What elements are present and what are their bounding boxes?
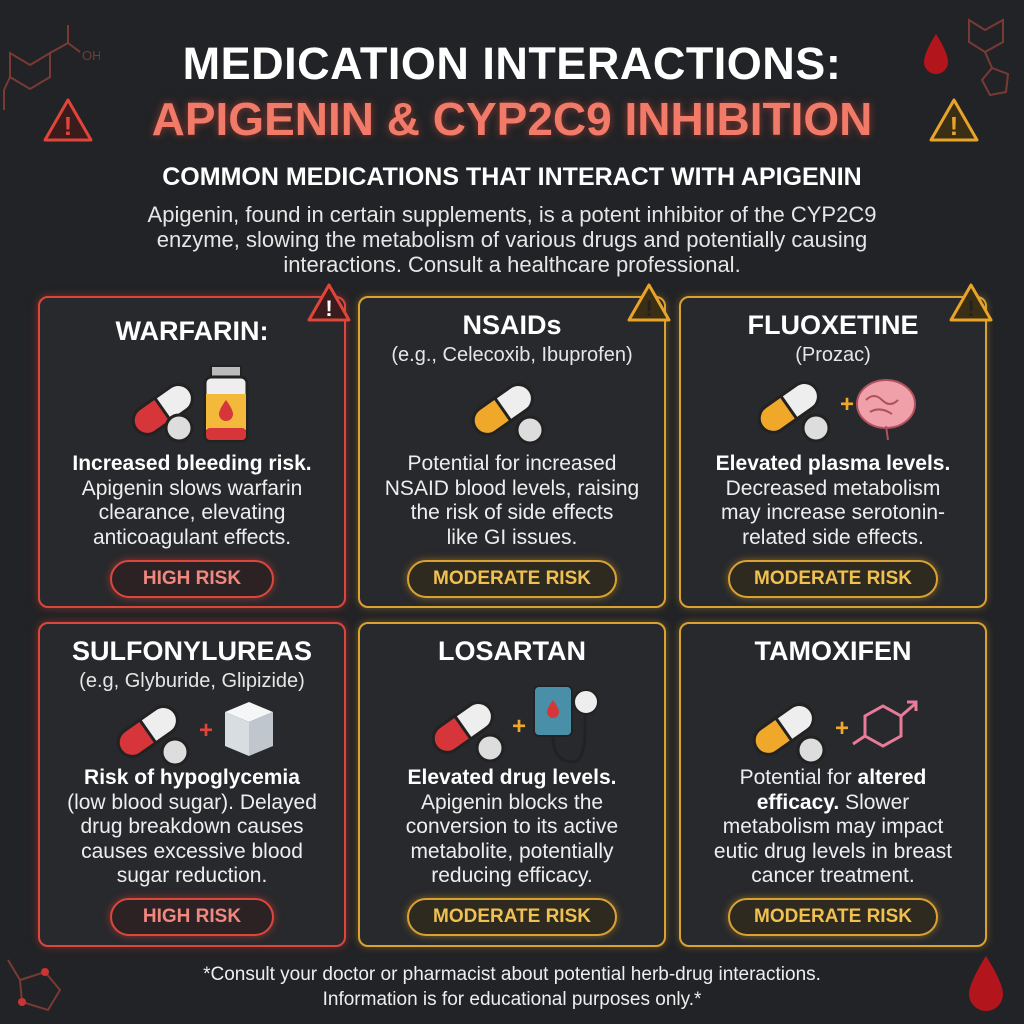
text [406, 766, 618, 887]
text: reducing efficacy. [431, 864, 593, 887]
footer [203, 964, 821, 1010]
card title: LOSARTAN [438, 636, 586, 666]
panel: sulfonylureas [38, 622, 346, 947]
badge: MODERATE RISK [433, 906, 591, 927]
card title: SULFONYLUREAS [72, 636, 312, 666]
icon: warning card 2: ! [645, 296, 653, 321]
text [72, 452, 312, 548]
icon: pill plus blood pressure cuff: + [512, 713, 526, 740]
text: like GI issues. [447, 526, 577, 548]
text: anticoagulant effects. [93, 526, 291, 548]
text [67, 766, 317, 887]
icon: warning card 3: ! [967, 296, 975, 321]
heading: COMMON MEDICATIONS THAT INTERACT WITH APIGENIN [162, 163, 862, 191]
icon: warning left [44, 98, 93, 142]
badge: MODERATE RISK [433, 568, 591, 589]
text: Apigenin blocks the [421, 790, 603, 814]
card title: NSAIDs [462, 310, 562, 340]
text: clearance, elevating [99, 501, 285, 524]
panel: nsaids [358, 296, 666, 608]
text: Apigenin slows warfarin [82, 476, 302, 500]
title: MEDICATION INTERACTIONS: [183, 38, 841, 89]
text [385, 452, 639, 548]
text: Potential for increased [408, 452, 616, 475]
badge [407, 898, 617, 936]
text: eutic drug levels in breast [714, 840, 952, 862]
text: cancer treatment. [751, 864, 915, 887]
panel: losartan [358, 622, 666, 947]
footer: Information is for educational purposes only.* [323, 989, 701, 1010]
icon: pill plus molecule: + [835, 715, 849, 742]
text: Increased bleeding risk. [72, 452, 312, 475]
card subtitle: (e.g., Celecoxib, Ibuprofen) [391, 344, 633, 366]
icon: pill plus brain [758, 379, 916, 442]
icon: pill plus blood pressure cuff [432, 685, 599, 764]
badge [728, 898, 938, 936]
icon: pills and bottle [132, 365, 248, 442]
panel: fluoxetine [679, 296, 987, 608]
text: Elevated drug levels. [408, 766, 616, 789]
text: related side effects. [742, 526, 924, 548]
icon: pill plus sugar cube [116, 702, 273, 766]
text: causes excessive blood [81, 840, 303, 862]
text [714, 766, 952, 887]
text [716, 452, 950, 548]
card title: WARFARIN: [116, 316, 268, 346]
icon: warning right [930, 98, 979, 142]
icon: pill plus sugar cube: + [199, 717, 213, 744]
text: conversion to its active [406, 815, 618, 838]
badge: HIGH RISK [143, 568, 241, 589]
badge [407, 560, 617, 598]
panel: warfarin [38, 296, 346, 608]
badge: MODERATE RISK [754, 906, 912, 927]
text: drug breakdown causes [80, 815, 303, 838]
badge [728, 560, 938, 598]
card subtitle: (e.g, Glyburide, Glipizide) [79, 670, 305, 692]
card title: TAMOXIFEN [754, 636, 912, 666]
text: the risk of side effects [411, 501, 613, 524]
icon: blood drop bottom right [969, 956, 1003, 1011]
intro text: interactions. Consult a healthcare professional. [283, 252, 741, 277]
icon: warning left: ! [64, 111, 72, 141]
badge: MODERATE RISK [754, 568, 912, 589]
text: efficacy. Slower [757, 790, 909, 814]
icon: warning card 1: ! [325, 296, 333, 321]
icon: pill plus brain: + [840, 391, 854, 418]
badge [110, 560, 274, 598]
text: sugar reduction. [117, 864, 267, 887]
text: Potential for altered [740, 766, 926, 789]
icon: pill plus molecule [752, 700, 918, 764]
text: (low blood sugar). Delayed [67, 790, 317, 814]
decoration: molecule left [3, 25, 100, 110]
card title: FLUOXETINE [747, 310, 918, 340]
badge: HIGH RISK [143, 906, 241, 927]
icon: pill [472, 383, 544, 444]
footer: *Consult your doctor or pharmacist about potential herb-drug interactions. [203, 964, 821, 985]
text: Decreased metabolism [726, 476, 940, 500]
card subtitle: (Prozac) [795, 344, 871, 366]
text: Risk of hypoglycemia [84, 766, 300, 789]
badge [110, 898, 274, 936]
text: Elevated plasma levels. [716, 452, 950, 475]
decoration: molecule bottom left [7, 960, 62, 1012]
text: metabolism may impact [723, 815, 943, 838]
intro text: Apigenin, found in certain supplements, is a potent inhibitor of the CYP2C9 [148, 202, 876, 227]
text: metabolite, potentially [410, 840, 614, 862]
icon: warning card 1 [308, 283, 350, 322]
icon: blood drop top right [924, 34, 948, 74]
icon: warning card 2 [628, 283, 671, 322]
icon: warning right: ! [950, 111, 958, 141]
panel: tamoxifen [679, 622, 987, 947]
decoration: molecule right [968, 18, 1009, 96]
subtitle title: APIGENIN & CYP2C9 INHIBITION [152, 93, 872, 145]
icon: warning card 3 [950, 283, 992, 322]
text: NSAID blood levels, raising [385, 476, 639, 500]
intro text: enzyme, slowing the metabolism of various drugs and potentially causing [157, 227, 867, 252]
intro text [148, 202, 876, 277]
text: may increase serotonin- [721, 501, 945, 524]
